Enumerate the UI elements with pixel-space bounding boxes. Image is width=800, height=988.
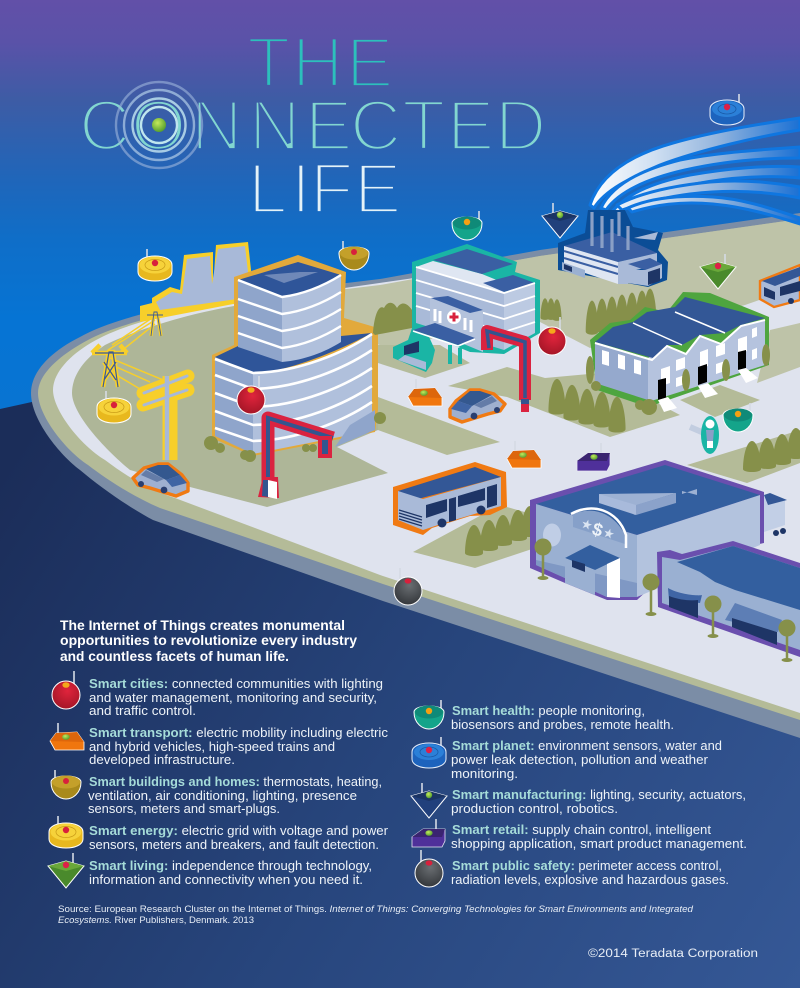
street trees — [534, 538, 796, 662]
legend: smart retail: Smart retail: supply chain control, intelligent — [452, 823, 712, 837]
legend column: left — [48, 671, 388, 888]
legend: smart health — [414, 700, 674, 732]
utility pole — [143, 376, 188, 460]
sensor: energy lower — [97, 391, 131, 423]
legend: smart transport: developed infrastructure. — [89, 753, 235, 767]
sensor: health hospital — [452, 211, 482, 240]
legend: smart health: Smart health: people monitoring, — [452, 704, 645, 718]
sensor: transport lower — [507, 441, 541, 468]
sensor: city near hospital — [538, 317, 566, 355]
legend: smart buildings and homes: ventilation, air conditioning, lighting, presence — [88, 789, 357, 803]
sensor: energy upper — [138, 249, 172, 281]
legend: smart transport: Smart transport: electric mobility including electric — [89, 726, 388, 740]
sensor: retail — [577, 443, 610, 471]
retail store, smart retail: ★ — [601, 525, 617, 542]
legend: smart cities: and traffic control. — [89, 704, 196, 718]
island ground — [31, 213, 800, 738]
intro heading — [60, 618, 357, 664]
legend: smart health: biosensors and probes, remote health. — [451, 718, 674, 732]
small right bus — [760, 265, 800, 307]
townhouses, smart homes — [590, 292, 770, 412]
sensor: transport upper — [408, 379, 442, 406]
intro heading: and countless facets of human life. — [60, 649, 289, 664]
copyright: ©2014 Teradata Corporation — [588, 948, 758, 960]
legend: smart public safety — [415, 850, 729, 887]
source citation — [58, 904, 694, 926]
factory, smart manufacturing — [558, 210, 668, 287]
legend: smart cities — [52, 671, 383, 718]
signal rings forming the O — [116, 82, 202, 168]
legend: smart energy — [49, 816, 388, 852]
truck behind store — [764, 493, 787, 536]
factory data streams — [590, 118, 800, 224]
shrubs around office tower — [204, 303, 412, 462]
legend: smart cities: Smart cities: connected communities with lighting — [89, 677, 383, 691]
sensor: living — [700, 254, 736, 289]
large bus, smart transport — [393, 462, 507, 535]
legend: smart public safety: radiation levels, explosive and hazardous gases. — [451, 873, 729, 887]
second store — [657, 541, 800, 657]
sky background — [0, 0, 800, 420]
intro heading: opportunities to revolutionize every industry — [60, 633, 357, 648]
retail store, smart retail — [530, 460, 764, 600]
person, smart health — [690, 416, 719, 454]
legend: smart transport — [50, 723, 388, 767]
legend: smart public safety: Smart public safety: perimeter access control, — [452, 859, 722, 873]
legend: smart manufacturing: Smart manufacturing: lighting, security, actuators, — [452, 788, 746, 802]
shrubs around hospital — [540, 289, 656, 335]
legend: smart buildings and homes — [51, 770, 382, 816]
right shrubs — [743, 428, 800, 472]
legend: smart planet: power leak detection, pollution and weather — [451, 753, 708, 767]
legend: smart planet: monitoring. — [451, 767, 518, 781]
sensor: planet — [710, 94, 744, 125]
legend: smart planet — [412, 737, 722, 781]
shrubs near townhouses — [548, 356, 657, 433]
legend: smart living — [48, 853, 372, 888]
legend: smart energy: Smart energy: electric grid with voltage and power — [89, 824, 388, 838]
title line: LIFE: LIFE — [248, 150, 401, 229]
legend: smart buildings and homes: sensors, meters and smart-plugs. — [88, 802, 280, 816]
title line: THE: THE — [247, 24, 393, 103]
cooling towers — [140, 242, 254, 322]
office tower, smart buildings — [212, 255, 378, 456]
sensor: building — [339, 241, 369, 270]
legend: smart retail — [412, 819, 747, 851]
map sensors — [97, 94, 753, 605]
sensor: manufacturing — [542, 203, 578, 238]
legend: smart retail: shopping application, smart product management. — [451, 837, 747, 851]
title line: CONNECTED: CONNECTED — [79, 87, 546, 166]
legend: smart energy: sensors, meters and breakers, and fault detection. — [89, 838, 379, 852]
retail store, smart retail: ★ — [579, 516, 595, 533]
legend: smart living: information and connectivity when you need it. — [89, 873, 363, 887]
sensor: city on tower — [237, 376, 265, 414]
title — [79, 24, 546, 229]
retail store, smart retail: $ — [590, 519, 605, 541]
legend column: right — [411, 700, 747, 887]
sensor: health by person — [723, 403, 753, 432]
legend: smart cities: and water management, monitoring and security, — [89, 691, 377, 705]
shrubs by bus — [465, 506, 539, 556]
power lines and pylons — [92, 312, 168, 392]
legend: smart manufacturing — [411, 783, 746, 818]
hospital, smart health — [393, 244, 540, 372]
legend: smart living: Smart living: independence through technology, — [89, 859, 372, 873]
sensor: public safety — [394, 568, 422, 605]
intro heading: The Internet of Things creates monumental — [60, 618, 345, 633]
legend: smart buildings and homes: Smart buildings and homes: thermostats, heating, — [89, 775, 382, 789]
lower navy panel — [0, 398, 800, 988]
legend: smart planet: Smart planet: environment sensors, water and — [452, 739, 722, 753]
street signal, front — [258, 418, 333, 499]
traffic signal, right — [487, 331, 529, 405]
legend: smart transport: and hybrid vehicles, high-speed trains and — [89, 740, 335, 754]
source citation: Source: European Research Cluster on the Internet of Things. Internet of Things: Converging Technologies for Smart Environments and Integrated — [58, 904, 694, 915]
car, lower-left — [133, 464, 188, 496]
legend: smart manufacturing: production control, robotics. — [451, 802, 618, 816]
car, center — [450, 390, 505, 422]
source citation: Ecosystems. River Publishers, Denmark. 2013 — [58, 915, 254, 926]
